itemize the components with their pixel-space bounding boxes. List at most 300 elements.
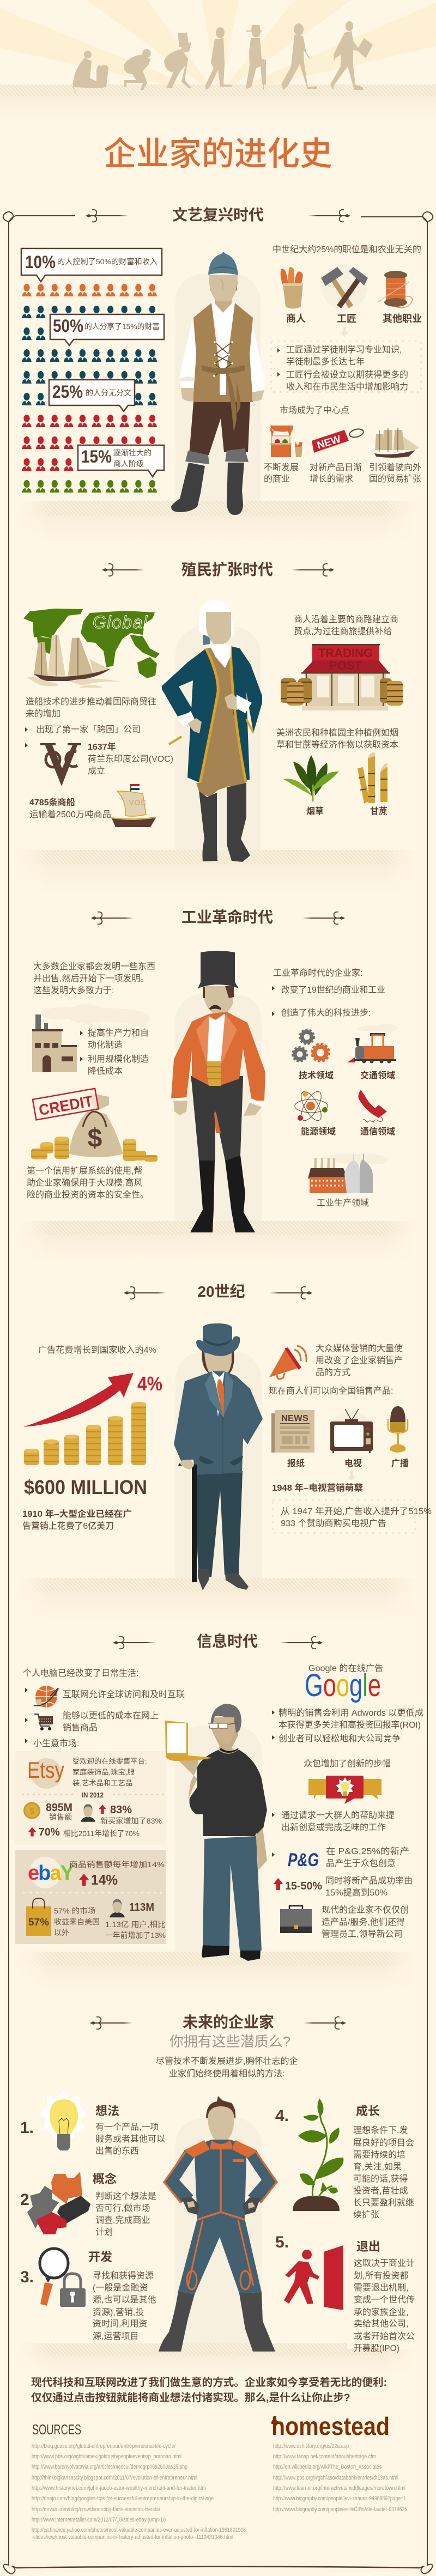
panel: eBay: ebaY [28,1862,74,1885]
step 4: growth: 续扩张 [353,2210,379,2220]
bullet marker [25,1688,28,1692]
section: Renaissance [19,206,422,545]
text: foreign trade: 国的贸易扩张 [369,474,421,484]
text: inventions [33,962,155,995]
step 1: idea: 出售的东西 [95,2146,139,2156]
source list: left: http://onvab.com/blog/crowdsourcing-facts-statistics-trends/ [32,2506,161,2513]
panel: ad revenue: 从 1947 年开始,广告收入提升了515% [281,1506,432,1516]
panel: eBay: 57% [28,1917,49,1928]
panel: craftsmen bullets: 工匠通过学徒制学习专业知识, [286,345,402,355]
step 5: exit: 划,所有投资都 [354,2271,408,2281]
icon: telephone [358,1090,387,1122]
panel: ad revenue [272,1500,432,1533]
text: new products: 增长的需求 [310,474,353,484]
evolution silhouettes [73,21,373,93]
smoke [41,1004,150,1027]
step 3: development: 源,也可以是其他 [93,2295,156,2305]
callout: 50%: 50% [53,316,83,336]
icon: megaphone [269,1346,306,1379]
icon: up arrow [274,1878,283,1890]
step 4: growth: 4. [275,2107,289,2125]
icon: NEW tag: NEW [316,434,342,452]
text: new products: 对新产品日渐 [310,463,362,472]
step 3: development: 开发 [88,2250,112,2264]
label: sugarcane: 甘蔗 [370,806,387,816]
logo: Google: Google [305,1668,381,1703]
stamp: credit: CREDIT [38,1092,94,1119]
step 5: exit: 承的家族企业, [354,2307,408,2317]
panel: eBay: 1.13亿 用户,相比 [105,1920,166,1929]
coins: right [123,1139,158,1162]
icon: market stall [270,426,302,457]
heading: future: 未来的企业家 [183,2014,274,2031]
text: inventions: 并出售,然后开始下一项发明。 [33,974,149,983]
bullet marker [25,743,28,748]
text: shipbuilding: 造船技术的进步推动着国际商贸往 [26,697,156,707]
arrow: down [348,1471,355,1481]
step 4: growth: 投资者,苗壮成 [353,2186,408,2196]
bullet: first multinational: 出现了第一家「跨国」公司 [36,725,141,734]
icon: atom [295,1089,328,1123]
source list: right: http://www.ushistory.org/us/22a.asp [273,2443,349,2450]
panel: eBay: 一年前增加了13% [105,1931,166,1940]
step 1: idea [20,2089,165,2156]
text: credit system: 险的商业投资的资本的安全性。 [27,1190,149,1200]
panel: craftsmen bullets: 学徒制最多长达七年 [286,357,365,367]
bullet: crowdsourcing help: 通过请求一大群人的帮助来提 [281,1811,395,1820]
panel: Etsy: 70% [39,1826,60,1838]
text: merchant ships: 4785条商船 [29,797,75,807]
sunburst header background [0,0,436,96]
source list: left: http://www.historynet.com/john-jacob-astor-wealthy-merchant-and-fur-trader.htm [32,2485,206,2492]
source list: left: http://www.internetretailer.com/2012/07/18/sales-ebay-jump-10 [32,2517,166,2523]
text: internet: 互联网允许全球访问和及时互联 [63,1690,185,1699]
source list: left: http://doejo.com/blog/googles-tips-for-successful-entrepreneurship-in-the-digital-age [32,2495,214,2502]
figure: future entrepreneur [159,2096,277,2352]
source list: right [273,2443,407,2513]
step 2: concept [20,2172,156,2237]
icon: money bag: $ [88,1124,102,1153]
text: cash crops [276,728,398,750]
text: 1910: 1910 年–大型企业已经在广 [22,1509,132,1519]
label: craftsman: 工匠 [337,313,356,324]
panel: ad revenue: 933 个赞助商购买电视广告 [281,1518,386,1528]
text: crowdsourcing: 众包增加了创新的步幅 [304,1759,391,1769]
step 5: exit [275,2233,415,2353]
text: inventions: 这些发明大多致力于: [33,986,114,995]
silhouette: top hat merchant [164,33,192,88]
bullet: changed commerce: 改变了19世纪的商业和工业 [281,985,385,995]
icon: shopping cart [34,1714,53,1730]
header ground strip [0,84,436,121]
ground strip [28,1578,408,1601]
heading: 20th century [124,1283,312,1300]
ground strip [28,850,408,874]
text: commerce: 不断发展 [264,463,299,472]
bullets: productivity: 利用规模化制造 [88,1054,149,1064]
arrow: down [341,327,348,337]
heading: industrial [91,908,345,926]
heading: Renaissance: 文艺复兴时代 [172,206,264,223]
text: 1910: 告营销上花费了6亿美刀 [22,1521,114,1531]
panel: eBay: 113M [129,1901,154,1913]
conclusion [31,2376,387,2404]
icon: globe [34,1686,58,1708]
icon: world map [23,609,160,678]
step 4: growth: 展良好的项目会 [353,2138,414,2148]
icon: trading post [281,644,403,710]
source list: left [32,2443,246,2541]
step 1: idea: 有一个产品,一项 [95,2122,159,2132]
bullet: crowdsourcing help [272,1811,395,1832]
callout: 15%: 逐渐壮大的 [113,448,152,457]
silhouette: walking man with laptop [330,21,373,90]
panel: eBay: 57% 的市场 [54,1906,95,1915]
text: P&G [326,1846,409,1868]
step 5: exit: 或者开始首次公 [354,2331,415,2341]
step 2: concept: 计划 [95,2227,113,2237]
text: shipbuilding [26,697,156,719]
panel: Etsy: 895M [46,1802,72,1814]
text: trading posts: 贸点,为过往商旅提供补给 [294,627,392,636]
silhouette: crouching merchant [124,49,151,90]
logo: P&G: P&G [288,1850,319,1870]
label: merchant: 商人 [286,313,306,324]
icon: microphone [388,1406,408,1453]
text: VOC founding [88,742,173,776]
step 4: growth: 育,关注,如果 [353,2162,402,2172]
panel: craftsmen bullets: 工匠行会被设立以期获得更多的 [286,370,408,380]
logo: homestead: homestead [271,2412,390,2440]
figure arch [175,1352,262,1578]
text: success rate: 同时将新产品成功率由 [325,1876,413,1886]
callout: 25% [49,380,135,411]
text: shipbuilding: 来的增加 [26,709,60,719]
callout: 25%: 的人分无分文 [86,388,131,397]
text: ad spending: 广告花费增长到国家收入的4% [38,1345,156,1355]
label: radio: 广播 [391,1459,409,1468]
icon: sailing ship [373,428,420,458]
bullet marker [25,1718,28,1722]
callout: 25%: 25% [52,382,83,402]
bullets: productivity [80,1028,149,1076]
icon: bread basket [281,267,303,308]
label: transport: 交通领域 [360,1070,395,1080]
figure arch [175,2118,262,2343]
text: sell online [63,1711,159,1733]
bullets: productivity: 提高生产力和自 [88,1028,149,1038]
bullets: adwords: 本获得更多关注和高投资回报率(ROI) [278,1720,421,1730]
section: 20th century [19,1283,432,1621]
panel: Etsy: 相比2011年增长了70% [63,1829,140,1838]
text: industrial entrepreneurs: 工业革命时代的企业家: [273,968,362,978]
silhouette: walking man [281,23,317,90]
section: Information age [15,1633,423,1995]
panel behind exit text [347,2341,417,2349]
bullet: crowdsourcing help: 出新创意或完成乏味的工作 [281,1822,386,1832]
text: sell online: 销售商品 [63,1723,98,1733]
text: success rate: 15%提高到50% [325,1888,387,1898]
text: foreign trade [369,463,421,484]
icon: factory [32,1014,77,1072]
title: 企业家的进化史 [104,136,332,172]
icon: trading post: TRADING [318,646,373,660]
panel: Etsy: 83% [110,1804,132,1816]
label: TV: 电视 [344,1459,362,1468]
text: mass media: 品的方式 [316,1368,350,1377]
text: modern entrepreneur: 管理员工,领导新公司 [322,1929,402,1939]
text: Google ads: Google 的在线广告 [308,1663,383,1673]
step 4: growth: 理想条件下,发 [353,2125,408,2135]
bullets: adwords [272,1708,423,1743]
step 5: exit: 需要退出机制, [354,2283,408,2293]
text: cash crops: 美洲农民和种植园主种植例如烟 [276,728,398,738]
source list: right: http://www.tanap.net/content/about/heritage.cfm [273,2453,376,2460]
panel: eBay: 14% [91,1872,118,1888]
icon: newspaper: NEWS [281,1414,308,1423]
text: 1948: 1948 年–电视营销萌蘖 [272,1483,363,1493]
icon: ship with waves [27,635,123,688]
text: share of non-agricultural jobs: 中世纪大约25%的职位是和农业无关的 [272,245,421,254]
bullets: adwords: 创业者可以轻松地和大公司竞争 [278,1734,401,1743]
panel: Etsy: 装,艺术品和工艺品 [72,1779,132,1787]
step 4: growth [275,2098,414,2220]
panel: eBay: 以外 [54,1928,69,1937]
text: merchant ships: 运输着2500万吨商品 [29,810,111,819]
step 5: exit: 开募股(IPO) [354,2343,399,2353]
bullets: productivity: 降低成本 [88,1066,123,1076]
icon: train [347,1024,398,1064]
text: cash crops: 草和甘蔗等经济作物以获取资本 [276,740,398,750]
section: Colonial expansion [19,561,417,894]
conclusion: 仅仅通过点击按钮就能将商业想法付诸实现。那么,是什么让你止步? [31,2391,350,2404]
panel: eBay [15,1850,166,1944]
figure arch [175,627,261,850]
text: modern entrepreneur: 造产品/服务,他们还得 [322,1917,405,1927]
panel: Etsy: 受欢迎的在线零售平台: [72,1757,147,1765]
panel: eBay: 商品销售额每年增加14% [69,1860,165,1869]
step 5: exit: 退出 [356,2240,380,2253]
callout: 15%: 15% [81,447,112,466]
chart: coin stacks [24,1402,146,1465]
arrow: growth [23,1373,134,1427]
heading: 20th century: 20世纪 [197,1283,245,1300]
step 5: exit: 卖给其他公司, [354,2319,408,2329]
stat: 15-50%: 15-50% [285,1880,322,1892]
heading: industrial: 工业革命时代 [181,908,273,926]
ground strip [28,1221,408,1246]
icon: television [330,1409,373,1453]
bullets: adwords: 精明的销售会利用 Adwords 以更低成 [278,1708,423,1718]
callout: 50% [50,314,164,345]
text: new products [310,463,362,484]
text: credit system [27,1166,149,1200]
source list: left: http://ca.finance.yahoo.com/photos/most-valuable-companies-ever-adjusted-for-inflation-1351801906 [32,2527,246,2534]
step 3: development: 资时间,利用资 [93,2319,147,2329]
barrels: right [380,678,403,706]
source list: left: http://blog.gcase.org/global-entrepreneur/entrepreneurial-life-cycle/ [32,2443,176,2450]
panel: Etsy: IN 2012 [82,1791,104,1799]
stat: 4%: 4% [137,1372,162,1395]
figure arch [175,274,261,501]
bullet: small business: 小生意市场: [33,1738,79,1748]
conclusion: 现代科技和互联网改进了我们做生意的方式。企业家如今享受着无比的便利: [31,2376,387,2389]
step 3: development: 寻找和获得资源 [93,2271,154,2281]
callout: 15% [78,445,164,477]
silhouette: standing man [205,27,232,90]
people grid [22,284,157,493]
step 5: exit: 5. [275,2233,289,2251]
source list: left: -slideshow/most-valuable-companies-in-history-adjusted-for-inflation-photo--1113431046.html [32,2534,233,2541]
icon: newspaper [271,1410,314,1453]
icon: VOC ship [111,784,156,827]
heading: future [90,2014,346,2031]
text: credit system: 第一个信用扩展系统的使用,帮 [27,1166,142,1176]
bullet: technology: 创造了伟大的科技进步: [281,1008,371,1018]
text: commerce: 的商业 [264,474,290,484]
text: P&G: 品产生于众包创意 [326,1858,396,1868]
step 4: growth: 可能的话,获得 [353,2174,408,2184]
panel: Etsy: 家庭装饰品,珠宝,服 [72,1767,135,1776]
step 2: concept: 概念 [93,2172,117,2186]
text: foreign trade: 引领着驶向外 [369,463,421,472]
callout: 15%: 商人阶级 [113,459,144,468]
figure: colonial merchant [162,600,262,862]
panel: craftsmen bullets [271,341,421,392]
ground strip [28,501,408,525]
ground strip [28,1952,408,1974]
text: trading posts [294,615,398,636]
icon: industrial plant [308,1153,388,1193]
icon: thread spool [379,271,412,308]
step 3: development: (一般是金融资 [93,2283,148,2293]
logo: VOC [40,743,81,786]
step 5: exit: 变成一个世代传 [354,2295,415,2305]
icon: trading post: POST [329,659,362,672]
silhouette: man with cane [246,25,266,90]
step 4: growth: 需要持续的培 [353,2150,405,2160]
step 2: concept: 判断这个想法是 [95,2191,156,2201]
section: Future entrepreneur [19,2014,417,2377]
text: merchant ships [29,797,111,819]
text: market center: 市场成为了中心点 [280,405,349,415]
text: intro [156,2056,298,2079]
icon: sugarcane [358,752,387,804]
text: mass media [316,1344,403,1377]
source list: left: http://www.pbs.org/wgbh/amex/goldrush/peopleevents/p_brannan.html [32,2453,181,2460]
icon: tobacco [283,755,339,801]
figure arch [175,1726,262,1952]
text: PC: 个人电脑已经改变了日常生活: [23,1668,138,1678]
heading: information age [113,1633,323,1650]
source list: right: http://en.wikipedia.org/wiki/The_Boston_Associates [273,2464,382,2470]
step 3: development [20,2249,156,2341]
label: newspaper: 报纸 [287,1458,305,1468]
step 4: growth: 长只要盈利就继 [353,2198,414,2208]
figure arch [175,994,262,1221]
bullet marker [272,1852,275,1857]
heading: colonial: 殖民扩张时代 [181,561,273,578]
section: Industrial revolution [19,908,417,1265]
panel: eBay: 收益来自美国 [54,1917,100,1926]
text: modern entrepreneur [322,1905,409,1939]
text: inventions: 大多数企业家都会发明一些东西 [33,962,155,971]
source list: left: http://www.baronyofvatavia.org/articles/medcul/demogrph092000as35.php [32,2464,187,2470]
step 5: exit: 这取决于商业计 [354,2258,415,2268]
subheading: 你拥有这些潜质么? [169,2033,290,2050]
step 1: idea: 1. [20,2119,34,2137]
step 2: concept: 否可行,做市场 [95,2203,150,2213]
source list: left: http://thinkbigkansascity.blogspot.com/2011/07/evolution-of-entrepreneur.html [32,2475,197,2481]
figure: 20th century salesman [174,1323,263,1590]
label: communication: 通信领域 [360,1127,395,1137]
source list: right: http://www.learner.org/interactives/middleages/moretown.html [273,2485,405,2492]
icon: briefcase [280,1906,312,1933]
icon: money bag [69,1093,123,1157]
icon: gears [293,1030,329,1061]
text: Global: Global [93,612,148,632]
panel: Etsy: Etsy [27,1757,64,1783]
panel: Etsy: 销售额 [49,1813,72,1821]
label: energy: 能源领域 [301,1126,336,1137]
text: 1910 [22,1509,132,1531]
heading: sources: SOURCES [32,2421,81,2438]
panel: Etsy: $ [29,1807,34,1816]
step 1: idea: 服务或者其他可以 [95,2134,165,2144]
label: technology: 技术领域 [299,1070,334,1080]
step 2: concept: 2 [20,2191,29,2209]
bullets: productivity: 动化制造 [88,1040,123,1050]
figure: industrial entrepreneur [171,951,265,1232]
label: tobacco: 烟草 [306,806,324,816]
text: commerce [264,463,299,484]
text: intro: 业家们始终使用着相似的方法: [169,2069,284,2079]
label: industrial production: 工业生产领域 [317,1198,369,1208]
ground strip [28,2343,408,2362]
icon: crossed hammers [321,265,368,309]
callout: 10% [21,248,162,282]
panel: Etsy [15,1751,166,1845]
panel: craftsmen bullets: 收入和在市民生活中增加影响力 [286,382,408,392]
text: success rate [325,1876,413,1898]
text: credit system: 助企业家确保用于大规模,高风 [27,1178,142,1188]
step 3: development: 资源),营销,投 [93,2307,144,2317]
label: other jobs: 其他职业 [383,313,422,324]
text: mass media: 大众媒体营销的大量使 [316,1344,403,1353]
icon: NEW tag [312,428,364,453]
text: mass media: 用改变了企业家销售产 [316,1356,403,1365]
stat: $600 million: $600 MILLION [24,1476,147,1498]
heading: information age: 信息时代 [197,1633,258,1650]
text: VOC founding: 1637年 [88,742,116,752]
text: sell online: 能够以更低的成本在网上 [63,1711,159,1721]
heading: colonial [102,561,334,578]
icon: speech bubbles [308,1776,382,1804]
panel: Etsy: 新买家增加了83% [100,1816,162,1825]
text: VOC founding: 成立 [88,766,105,776]
barrels: left [281,678,312,706]
step 3: development: 源,运营项目 [93,2331,138,2341]
step 1: idea: 想法 [95,2104,119,2118]
text: nationwide: 现在商人们可以向全国销售产品: [269,1386,393,1396]
icon: VOC ship: VOC [129,798,147,807]
coins: left [31,1137,69,1159]
silhouette: seated trader [73,51,108,93]
heading: Renaissance [86,206,350,223]
text: trading posts: 商人沿着主要的商路建立商 [294,615,398,624]
source list: right: http://www.pbs.org/wgbh/aso/databank/entries/dt13as.html [273,2475,398,2481]
step 2: concept: 调查,完成商业 [95,2215,150,2225]
